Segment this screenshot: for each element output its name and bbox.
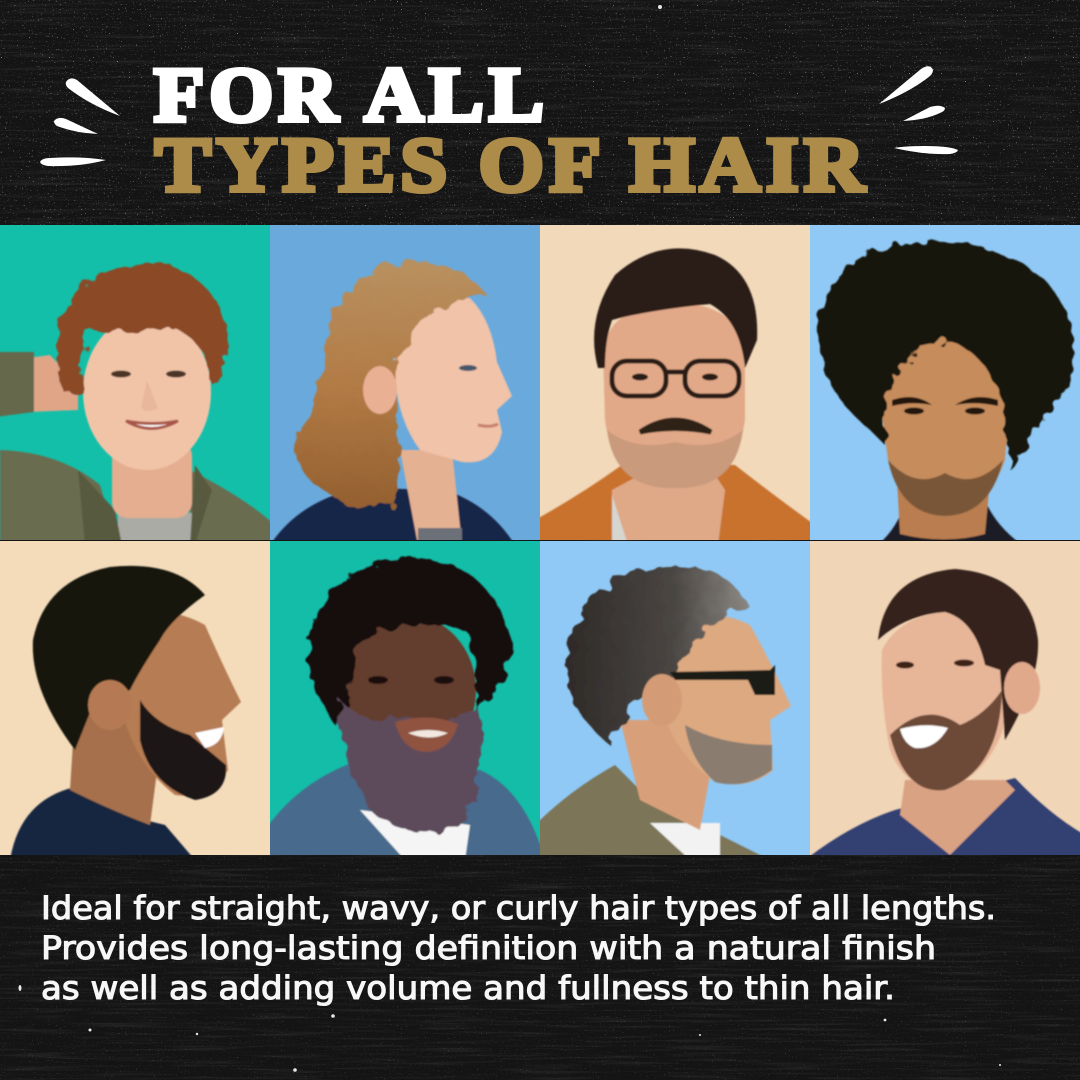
- brows and eyes: [892, 397, 998, 414]
- hair: [57, 264, 228, 395]
- shoulders and jacket: [0, 449, 104, 540]
- title: [154, 52, 870, 208]
- panel: curly auburn hair man: [0, 225, 275, 545]
- body text: [41, 889, 996, 1007]
- glasses: [612, 361, 739, 396]
- eye: [459, 365, 477, 371]
- navy jacket: [270, 488, 515, 545]
- face: [345, 622, 477, 722]
- panel: salt and pepper hair profile with glasses: [535, 541, 810, 860]
- curly hair: [818, 242, 1075, 470]
- panel: dark hair beard profile: [0, 541, 270, 860]
- afro: [308, 557, 512, 730]
- panel: long wavy blond hair profile: [270, 225, 540, 545]
- eyes and smile: [111, 370, 186, 378]
- neck and shoulder: [882, 506, 1018, 540]
- eyes: [368, 676, 454, 684]
- navy t-shirt: [10, 787, 195, 860]
- moustache: [640, 420, 711, 432]
- eyes: [632, 374, 718, 380]
- panel: afro curly hair man: [810, 225, 1080, 545]
- blue shirt: [805, 778, 1080, 860]
- body line 1: Ideal for straight, wavy, or curly hair types of all lengths.: [41, 889, 996, 927]
- smile: [195, 727, 224, 748]
- smile: [900, 725, 948, 748]
- body line 2: Provides long-lasting definition with a natural finish: [41, 929, 936, 967]
- beard: [140, 700, 226, 800]
- face: [120, 612, 241, 796]
- grey beard: [340, 700, 482, 833]
- face: [602, 304, 746, 446]
- orange jacket: [535, 465, 815, 545]
- face in profile: [394, 298, 512, 462]
- hair: [33, 566, 205, 750]
- hair: [878, 569, 1038, 740]
- icon: right sparkle strokes: [879, 66, 958, 154]
- face: [882, 611, 1010, 790]
- panel: man with glasses and moustache: [535, 225, 815, 545]
- title line: for all: FOR ALL: [154, 52, 549, 138]
- face: [660, 615, 791, 784]
- beard: [890, 690, 1002, 790]
- eyes: [896, 660, 974, 668]
- icon: left sparkle strokes: [40, 78, 120, 166]
- stubble: [888, 460, 1003, 516]
- glasses: [670, 665, 775, 695]
- olive jacket: [535, 765, 770, 860]
- denim jacket: [270, 764, 540, 855]
- raised arm: [28, 355, 78, 412]
- body line 3: as well as adding volume and fullness to thin hair.: [41, 969, 895, 1007]
- face: [881, 335, 1008, 480]
- long hair: [295, 262, 488, 505]
- face: [83, 314, 211, 470]
- stubble: [607, 430, 743, 488]
- beard: [685, 725, 772, 784]
- title line: types of hair: TYPES OF HAIR: [155, 122, 870, 208]
- panel: afro and grey beard man: [265, 541, 545, 860]
- hair: [565, 565, 748, 745]
- hair: [594, 248, 757, 368]
- panel: side part man smiling: [805, 541, 1080, 860]
